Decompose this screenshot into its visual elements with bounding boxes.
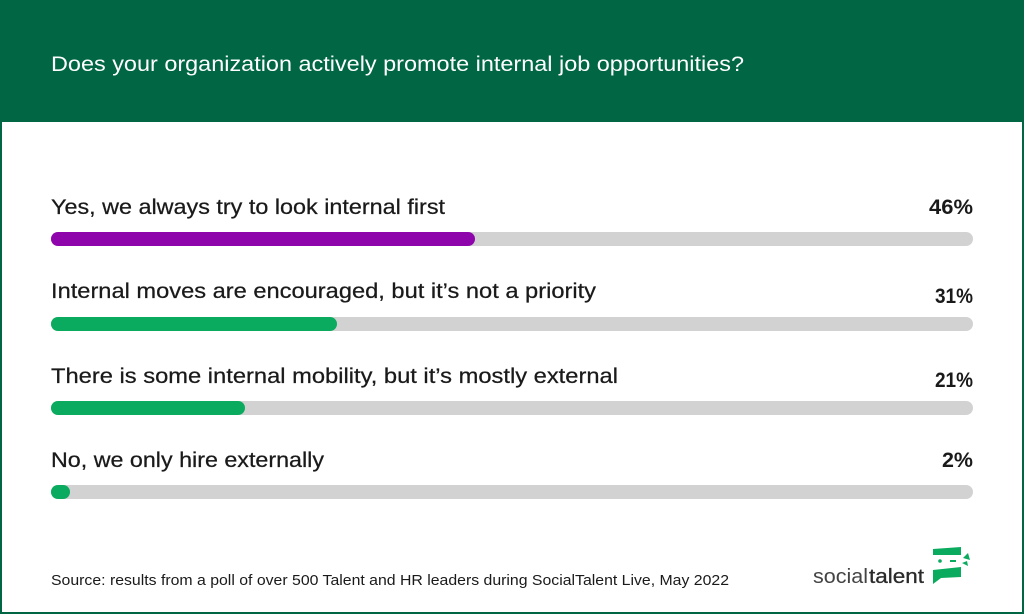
poll row: some internal mobility: 21% bbox=[935, 368, 973, 392]
poll row: some internal mobility: There is some internal mobility, but it’s mostly external bbox=[51, 364, 618, 388]
logo: socialtalent: social bbox=[813, 566, 868, 588]
poll row: encouraged, not a priority: Internal moves are encouraged, but it’s not a priority bbox=[51, 279, 596, 303]
poll row: encouraged, not a priority: 31% bbox=[935, 284, 973, 308]
poll row: look internal first: Yes, we always try to look internal first bbox=[51, 195, 445, 219]
source note: Source: results from a poll of over 500 Talent and HR leaders during SocialTalent Live, May 2022 bbox=[51, 572, 729, 589]
poll row: only hire externally: 2% bbox=[942, 448, 973, 472]
header banner bbox=[0, 0, 1024, 122]
poll row: encouraged, not a priority bbox=[51, 279, 973, 331]
poll row: look internal first bbox=[51, 195, 973, 246]
poll row: some internal mobility bbox=[51, 364, 973, 415]
icon: speech bubble bbox=[933, 547, 970, 584]
title: Does your organization actively promote internal job opportunities? bbox=[51, 52, 744, 76]
logo: socialtalent bbox=[813, 547, 970, 588]
poll row: only hire externally bbox=[51, 448, 973, 499]
logo: socialtalent: talent bbox=[869, 566, 924, 588]
poll row: only hire externally: No, we only hire externally bbox=[51, 448, 324, 472]
poll row: look internal first: 46% bbox=[929, 195, 973, 219]
